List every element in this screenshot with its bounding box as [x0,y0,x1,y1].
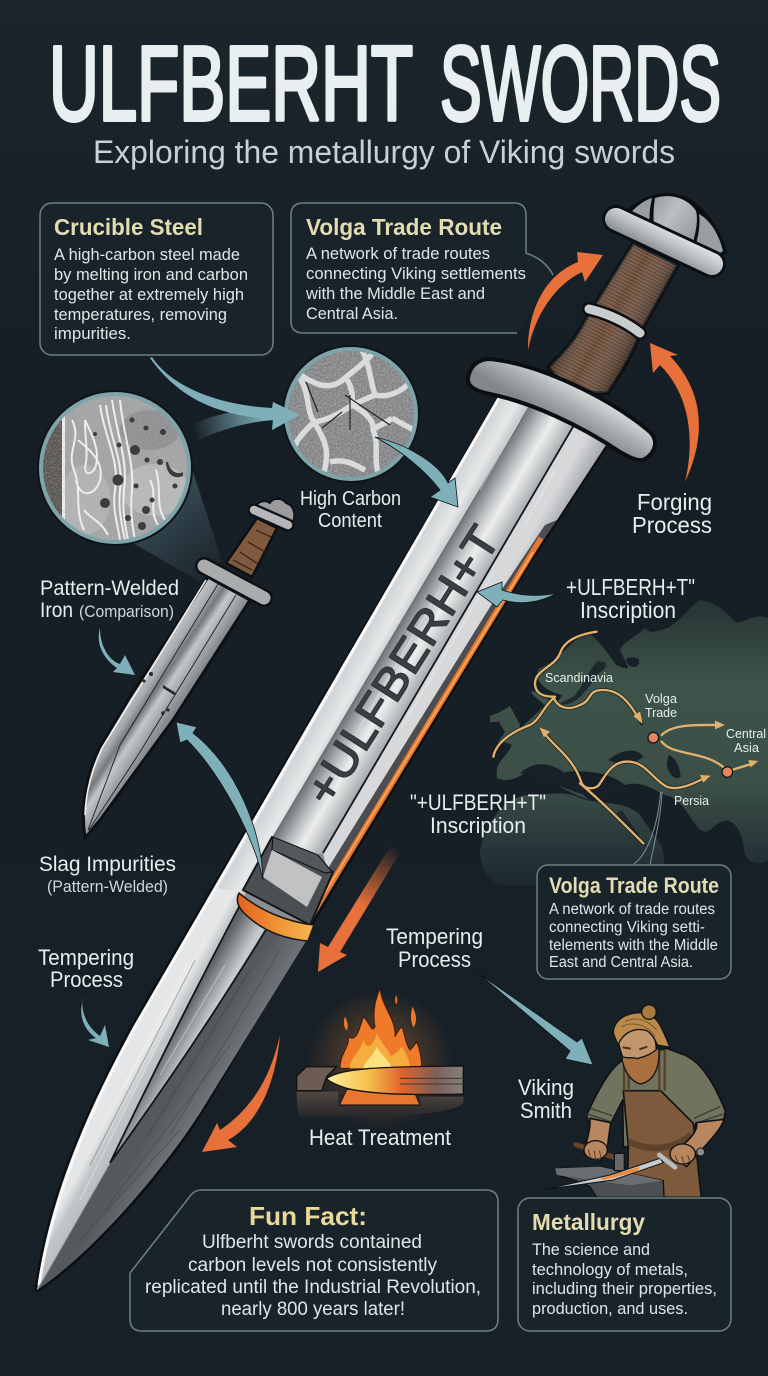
panel: crucible steel: Crucible Steel [54,214,203,240]
panel: metallurgy: Metallurgy [532,1209,645,1235]
label: tempering left: Tempering [38,945,134,970]
panel: fun fact: replicated until the Industrial Revolution, [145,1277,481,1298]
heated blade [327,1066,463,1094]
panel: crucible steel: A high-carbon steel made [54,246,240,264]
callout connector [633,792,662,865]
arrow: heat curved [202,1035,280,1152]
small sword pommel [254,499,294,525]
panel: fun fact: carbon levels not consistently [188,1255,438,1276]
magnified circle: high carbon content [282,345,420,483]
panel: volga trade route top: Central Asia. [306,305,398,323]
panel: metallurgy: production, and uses. [532,1300,688,1318]
label: inscription upper [566,574,695,623]
magnified circle: pattern-welded iron [37,390,193,546]
label: pattern-welded: Iron [40,599,73,622]
panel: metallurgy: The science and [532,1241,650,1259]
cutaway section [237,837,333,941]
brushed streaks [80,420,555,1200]
arrow: heat straight [318,845,401,972]
panel: fun fact [130,1190,498,1331]
arrow: micrograph to blade [375,437,458,507]
label: slag impurities: Slag Impurities [39,853,176,876]
hammer [576,1145,614,1157]
arrow: inscription to blade [477,582,557,607]
panel: volga trade route lower [537,865,731,979]
panel: volga trade route lower: Volga Trade Route [549,873,719,898]
inscription: +ULFBERH+T [295,517,510,814]
small sword guard [204,566,264,598]
label: heat treatment: Heat Treatment [309,1125,451,1150]
label: forging process: Forging [637,489,712,515]
map labels: Central [726,726,766,741]
guard [468,359,655,460]
route nodes [648,732,733,777]
map labels: Volga [645,691,678,706]
small sword grip [226,518,277,577]
small sword blade [83,577,250,838]
anvil [555,1167,664,1197]
label: forging process [632,489,712,538]
map labels: Trade [645,705,677,720]
map labels: Persia [674,793,710,808]
large ulfberht sword [37,195,725,1290]
arrow: tempering to smith [478,973,593,1065]
label: tempering left: Process [50,967,123,992]
map of trade routes [480,600,768,885]
grip [548,243,678,393]
map labels: Scandinavia [545,670,614,685]
seas [520,657,687,840]
label: viking smith: Smith [520,1098,572,1123]
panel: fun fact: nearly 800 years later! [221,1299,405,1320]
map labels: Asia [734,740,760,755]
pattern-welded comparison sword [83,499,294,838]
smith arms [583,1118,611,1162]
panel: crucible steel [40,203,273,355]
label: inscription upper: +ULFBERH+T" [566,574,695,600]
panel: volga trade route lower: East and Central Asia. [549,954,693,971]
smith torso [587,1048,725,1147]
panel: crucible steel: together at extremely high [54,286,244,304]
panel: volga trade route top: A network of trade routes [306,245,490,263]
panel: crucible steel: temperatures, removing [54,306,227,324]
slag marks [142,672,176,715]
trade routes [493,632,707,843]
panel: fun fact: Fun Fact: [249,1201,367,1231]
panel: volga trade route top: with the Middle East and [305,285,485,303]
label: high carbon: High Carbon [300,488,401,510]
label: inscription lower [410,790,546,838]
blade [37,393,608,1290]
label: high carbon: Content [318,510,382,532]
label: pattern-welded: (Comparison) [79,603,174,621]
forged sword [545,1158,663,1189]
label: tempering middle: Process [398,947,471,972]
label: slag impurities [39,853,176,896]
forge base [297,1092,463,1117]
magnification beam [133,463,222,582]
label: tempering left [38,945,134,992]
label: inscription lower: "+ULFBERH+T" [410,790,546,815]
label: pattern-welded: Pattern-Welded [40,577,179,600]
arrow: tempering to blade [81,998,109,1047]
label: slag impurities: (Pattern-Welded) [47,878,168,896]
panel: volga trade route top [291,203,553,333]
label: viking smith: Viking [518,1075,574,1100]
panel: volga trade route top: connecting Viking settlements [306,265,526,283]
label: pattern-welded [40,577,179,622]
panel: volga trade route lower: A network of trade routes [549,901,715,918]
panel: metallurgy: technology of metals, [532,1261,688,1279]
map labels [545,670,766,808]
label: inscription lower: Inscription [430,813,526,838]
smith apron [623,1091,701,1197]
title: ULFBERHT [49,25,413,143]
smith head [617,1029,656,1067]
label: tempering middle [386,924,483,972]
label: inscription upper: Inscription [580,597,676,623]
panel: metallurgy: including their properties, [532,1280,717,1298]
lower fuller [110,905,267,1163]
panel: fun fact: Ulfberht swords contained [202,1232,422,1253]
arrow: forging upper [528,252,603,350]
panel: volga trade route lower: connecting Viking setti- [549,919,705,936]
label: tempering middle: Tempering [386,924,483,949]
heat treatment forge [297,988,463,1130]
viking smith [545,1005,725,1197]
panel: crucible steel: impurities. [54,325,131,343]
arrow: slag to small sword [176,722,263,880]
arrow: crucible to micrograph [150,357,300,430]
subtitle: Exploring the metallurgy of Viking swords [93,134,675,170]
label: forging process: Process [632,512,712,538]
arrow: pattern-welded to small sword [99,628,135,675]
label: viking smith [518,1075,574,1123]
map landmass [480,600,768,885]
label: high carbon [300,488,401,532]
arrow: forging lower [650,343,699,482]
panel: metallurgy [518,1198,731,1331]
panel: volga trade route lower: telements with the Middle [549,937,718,954]
flames [340,988,422,1068]
panel: crucible steel: by melting iron and carbon [54,266,248,284]
pommel [616,195,725,268]
arrow: faded micrograph link [193,408,275,441]
panel: volga trade route top: Volga Trade Route [306,214,502,240]
